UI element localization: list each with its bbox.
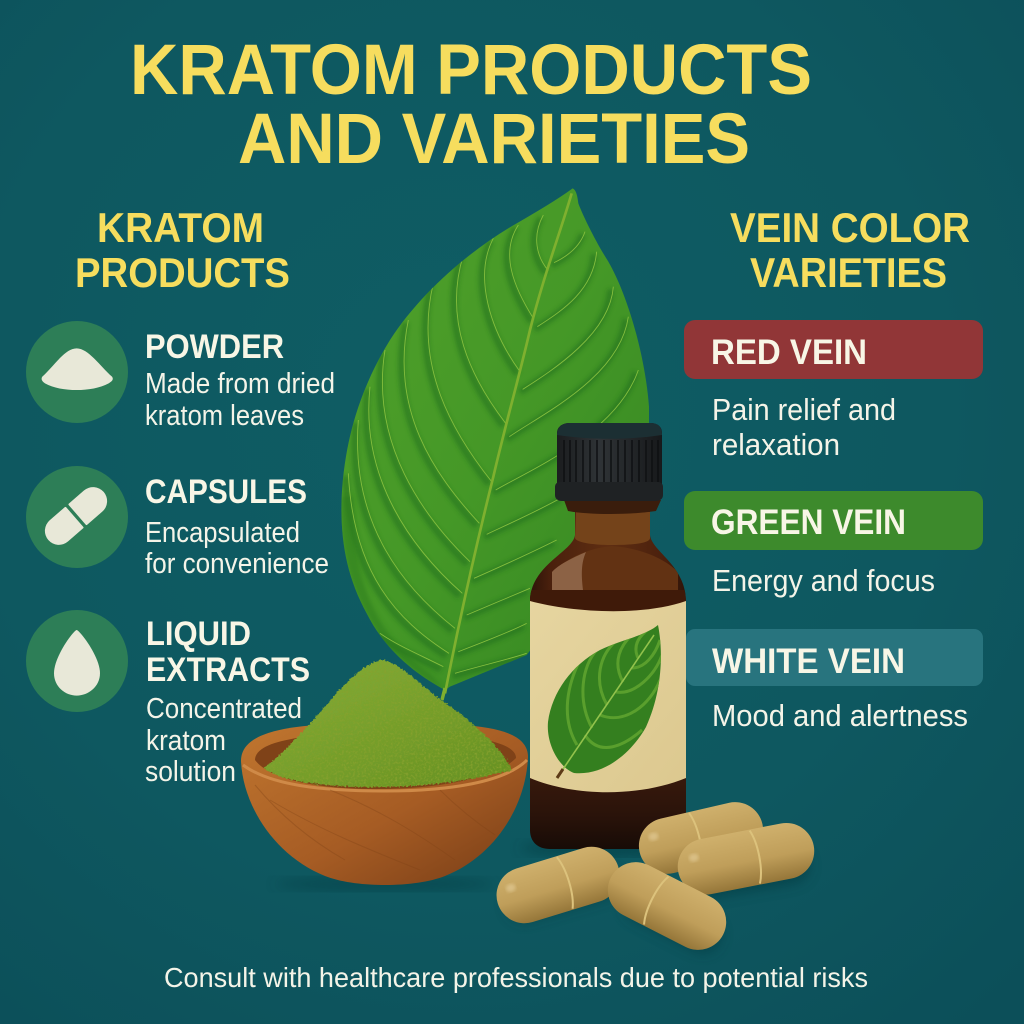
bottle glass bbox=[528, 500, 688, 852]
title: KRATOM PRODUCTS bbox=[130, 31, 812, 110]
capsule 3 bbox=[673, 818, 819, 899]
item: capsules: Encapsulated bbox=[145, 517, 300, 549]
item: powder: POWDER bbox=[145, 328, 284, 366]
bottle shadow bbox=[520, 840, 700, 856]
text: white vein effect: Mood and alertness bbox=[712, 698, 968, 733]
heading: kratom products: PRODUCTS bbox=[75, 249, 290, 296]
bowl inner bbox=[255, 733, 516, 789]
badge: white vein bbox=[686, 629, 983, 686]
text: red vein effect: Pain relief and bbox=[712, 392, 896, 427]
illustration: kratom leaf bbox=[341, 188, 649, 693]
badge: white vein: WHITE VEIN bbox=[712, 642, 905, 681]
heading: kratom products: KRATOM bbox=[97, 204, 264, 251]
heading: vein color varieties bbox=[730, 204, 970, 296]
item: powder: kratom leaves bbox=[145, 400, 304, 432]
heading: vein color varieties: VARIETIES bbox=[750, 249, 947, 296]
title: AND VARIETIES bbox=[238, 100, 750, 179]
bottle neck collar bbox=[564, 500, 661, 514]
illustration: dropper bottle bbox=[529, 423, 686, 858]
bowl shadow bbox=[275, 877, 495, 891]
powder mound bbox=[264, 660, 512, 787]
bottle label bbox=[530, 601, 686, 792]
capsule 4 bbox=[598, 852, 736, 960]
item: capsules: CAPSULES bbox=[145, 473, 307, 511]
text: red vein effect: relaxation bbox=[712, 427, 840, 462]
badge: green vein: GREEN VEIN bbox=[711, 503, 906, 542]
heading: kratom products bbox=[75, 204, 290, 296]
item: liquid extracts: EXTRACTS bbox=[146, 651, 310, 689]
badge: green vein bbox=[684, 491, 983, 550]
capsule shadows bbox=[502, 845, 812, 959]
icon: liquid drop bbox=[26, 610, 128, 712]
capsule 1 bbox=[490, 840, 626, 930]
icon: capsule bbox=[26, 466, 128, 568]
illustration: wooden bowl with powder bbox=[241, 660, 528, 891]
item: liquid extracts: solution bbox=[145, 756, 236, 788]
item: liquid extracts: LIQUID bbox=[146, 615, 251, 653]
item: powder bbox=[145, 328, 335, 432]
footer note: Consult with healthcare professionals due to potential risks bbox=[164, 962, 868, 993]
bowl wood grain bbox=[255, 785, 495, 870]
bottle cap bbox=[555, 423, 663, 501]
illustration: capsules bbox=[490, 797, 819, 960]
item: liquid extracts: kratom bbox=[146, 725, 226, 757]
illustration: leaf stem bbox=[442, 688, 445, 700]
panel: product list bbox=[26, 321, 335, 788]
item: liquid extracts bbox=[145, 615, 310, 788]
item: capsules: for convenience bbox=[145, 548, 329, 580]
bowl rim highlight bbox=[243, 760, 527, 791]
item: liquid extracts: Concentrated bbox=[146, 693, 302, 725]
label leaf bbox=[548, 625, 662, 778]
item: powder: Made from dried bbox=[145, 368, 335, 400]
badge: red vein: RED VEIN bbox=[711, 333, 867, 372]
title bbox=[130, 31, 812, 179]
capsule 2 bbox=[633, 797, 769, 879]
item: capsules bbox=[145, 473, 329, 580]
panel: vein color varieties bbox=[684, 320, 983, 733]
text: red vein effect bbox=[712, 392, 896, 462]
heading: vein color varieties: VEIN COLOR bbox=[730, 204, 970, 251]
badge: red vein bbox=[684, 320, 983, 379]
icon: powder bbox=[26, 321, 128, 423]
bowl body bbox=[241, 723, 528, 885]
text: green vein effect: Energy and focus bbox=[712, 563, 935, 598]
